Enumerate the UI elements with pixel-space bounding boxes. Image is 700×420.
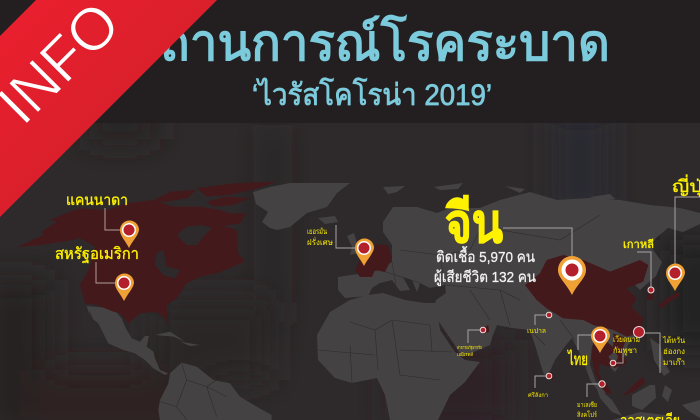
labels: countries: เกาหลี bbox=[623, 238, 654, 251]
pin: Japan bbox=[666, 264, 685, 291]
land: UK and Ireland bbox=[347, 233, 362, 255]
ribbon: INFO bbox=[0, 0, 217, 217]
land: Mexico, Central and South America bbox=[87, 306, 272, 420]
country: China bbox=[481, 255, 680, 397]
labels: countries: กัมพูชา bbox=[613, 346, 637, 356]
connector lines bbox=[96, 197, 700, 397]
land: islands of Southeast Asia and Oceania bbox=[596, 338, 700, 418]
labels: countries: แคนนาดา bbox=[66, 192, 128, 209]
land: Eurasia bbox=[338, 192, 700, 396]
markers: small location dots bbox=[480, 287, 654, 387]
labels: countries: เวียดนาม bbox=[613, 335, 640, 344]
labels: countries: เยอรมัน bbox=[307, 227, 327, 236]
labels: countries: มาเลเซีย bbox=[577, 401, 597, 409]
world map bbox=[17, 182, 700, 420]
pin: China bbox=[558, 256, 586, 295]
labels: countries: สาธารณรัฐอาหรับ bbox=[457, 345, 482, 351]
labels: countries: เนปาล bbox=[527, 328, 546, 335]
labels: countries: เอมิเรตส์ bbox=[457, 351, 473, 357]
labels: countries: สหรัฐอเมริกา bbox=[55, 246, 139, 263]
land: Iceland bbox=[318, 216, 338, 224]
blurred photo background bbox=[0, 110, 700, 420]
callout: China figures bbox=[434, 194, 536, 286]
callout: China figures: ติดเชื้อ 5,970 คน bbox=[436, 246, 535, 266]
labels: countries: ฝรั่งเศษ bbox=[307, 236, 333, 247]
land: Greenland bbox=[253, 183, 350, 230]
labels: countries: ฮ่องกง bbox=[663, 347, 685, 356]
title: สถานการณ์โรคระบาด bbox=[130, 15, 610, 71]
labels: countries: สิงคโปร์ bbox=[577, 410, 597, 419]
pin: United States bbox=[115, 274, 134, 301]
callout: China figures: จีน bbox=[445, 194, 503, 254]
subtitle: ‘ไวรัสโคโรน่า 2019’ bbox=[252, 77, 492, 112]
land: Africa bbox=[317, 293, 480, 420]
pin: Canada bbox=[120, 221, 139, 248]
country: Korea bbox=[647, 292, 654, 300]
country: Thailand and Vietnam bbox=[592, 342, 617, 387]
country: Japan bbox=[658, 292, 680, 308]
labels: countries: ศรีลังกา bbox=[528, 391, 548, 399]
land: Svalbard and Arctic islands bbox=[383, 183, 615, 200]
country: Sri Lanka bbox=[549, 371, 554, 381]
country: UAE bbox=[481, 325, 489, 334]
callout: China figures: ผู้เสียชีวิต 132 คน bbox=[434, 269, 536, 286]
country: Malaysia bbox=[598, 378, 612, 393]
pin: Thailand bbox=[591, 326, 610, 353]
labels: countries: มาเก๊า bbox=[663, 357, 685, 367]
pin: Germany and France bbox=[355, 238, 374, 266]
land: Australia bbox=[612, 412, 675, 420]
country: United States and Canada bbox=[17, 182, 277, 325]
country: France and Germany bbox=[355, 244, 392, 277]
header band bbox=[0, 0, 700, 123]
labels: countries: ไต้หวัน bbox=[662, 336, 685, 345]
labels: countries bbox=[55, 174, 700, 420]
labels: countries: ไทย bbox=[567, 349, 588, 369]
